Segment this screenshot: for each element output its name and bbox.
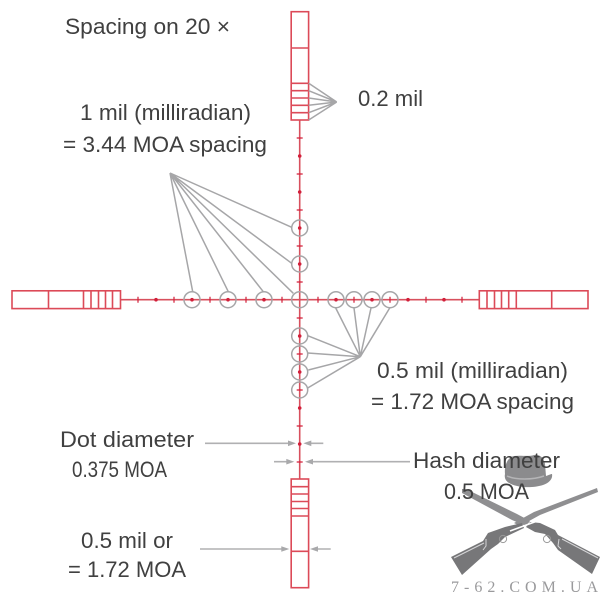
callout text: 1 mil spacing: = 3.44 MOA spacing [63,132,267,157]
callout: 0.2 mil fan [309,83,337,120]
label: dot diameter [60,427,194,482]
callout text: 0.5 mil spacing [371,358,574,414]
watermark: 7-62.COM.UA [451,579,598,596]
logo: hat and crossed rifles [451,455,600,575]
arrows: hash diameter [274,459,410,465]
fan: 1 mil spacing [170,173,293,293]
circles: 1 mil spacing [184,220,308,308]
label: hash diameter [413,448,560,504]
callout text: 1 mil spacing [63,100,267,157]
left post [12,291,120,309]
label: post width: = 1.72 MOA [68,557,186,582]
arrows: 0.5 mil post width [200,546,331,552]
right post [479,291,588,309]
vertical hash marks [297,138,303,462]
arrows: dot diameter [205,440,323,446]
label: dot diameter: Dot diameter [60,427,194,452]
reticle dots [154,154,446,446]
callout text: 0.2 mil: 0.2 mil [358,86,423,111]
rifle pointing upper-right [451,488,598,575]
crosshair thin lines [120,120,479,479]
bottom post [291,479,309,588]
label: post width: 0.5 mil or [81,528,173,553]
circles: 0.5 mil spacing [292,292,398,398]
label: hash diameter: Hash diameter [413,448,560,473]
title: Spacing on 20 × [65,14,230,39]
label: hash diameter: 0.5 MOA [444,479,529,504]
hat [505,455,552,487]
top post [291,12,309,120]
callout text: 1 mil spacing: 1 mil (milliradian) [80,100,251,125]
rifle pointing upper-left [462,489,600,574]
callout text: 0.5 mil spacing: 0.5 mil (milliradian) [377,358,568,383]
fan: 0.5 mil spacing [308,308,390,388]
label: post width [68,528,186,582]
label: dot diameter: 0.375 MOA [72,457,167,482]
callout text: 0.5 mil spacing: = 1.72 MOA spacing [371,389,574,414]
horizontal hash marks [138,297,462,303]
